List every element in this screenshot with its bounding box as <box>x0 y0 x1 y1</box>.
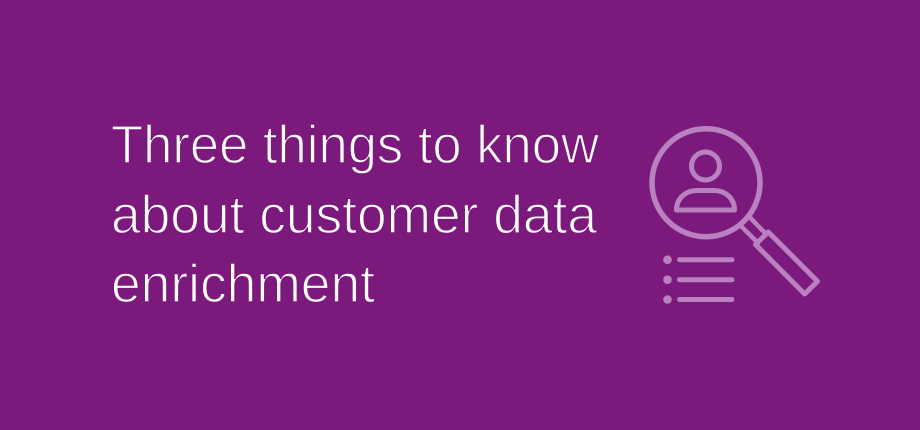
title: Three things to know <box>111 115 600 175</box>
icon: magnifier neck <box>742 218 765 243</box>
icon: magnifying glass over person with list <box>652 129 818 304</box>
icon: magnifier handle <box>756 232 818 294</box>
title: enrichment <box>111 254 375 314</box>
icon: person body <box>676 190 734 210</box>
icon: person head <box>692 152 720 180</box>
icon: list lines <box>680 260 732 300</box>
title: about customer data <box>111 185 598 245</box>
icon: list bullets <box>663 255 672 304</box>
icon: magnifier lens <box>652 129 760 237</box>
title <box>111 115 600 314</box>
